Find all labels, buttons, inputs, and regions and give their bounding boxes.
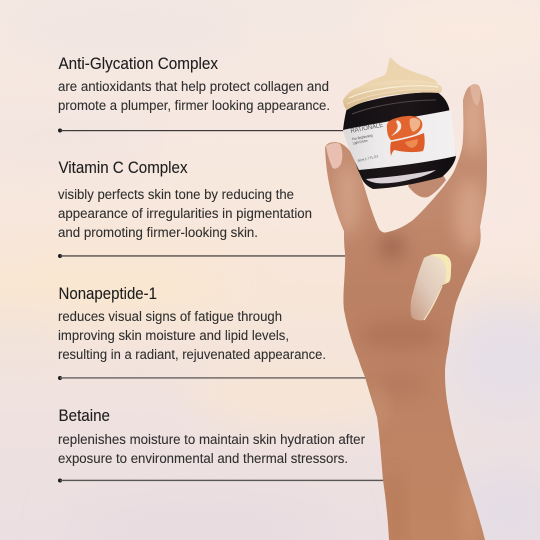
body: Vitamin C Complex description (58, 187, 312, 240)
text block: Anti-Glycation Complex (58, 55, 330, 113)
glass highlight (352, 100, 436, 114)
body: Vitamin C Complex description: visibly perfects skin tone by reducing the (58, 187, 294, 202)
body: Betaine description (58, 432, 366, 466)
skin shading (336, 86, 486, 540)
jar (343, 57, 456, 189)
hand and arm (325, 84, 487, 540)
index fingertip (470, 85, 480, 106)
body: Nonapeptide-1 description (58, 309, 326, 362)
logo mark (387, 116, 425, 156)
body: Nonapeptide-1 description: reduces visual signs of fatigue through (58, 309, 282, 324)
text block: Betaine (58, 407, 366, 466)
jar label (343, 110, 456, 170)
product text (351, 134, 379, 163)
heading: Nonapeptide-1: Nonapeptide-1 (58, 285, 157, 303)
divider line with dot 4 (58, 478, 385, 482)
illustration: hand holding jar (325, 57, 487, 540)
jar glass body (343, 92, 456, 189)
finger behind jar (408, 170, 446, 197)
body: Nonapeptide-1 description: resulting in a radiant, rejuvenated appearance. (58, 347, 326, 362)
product text: The Brightening (351, 134, 373, 141)
divider line with dot 3 (58, 376, 366, 380)
body: Nonapeptide-1 description: improving skin moisture and lipid levels, (58, 328, 289, 343)
body: Anti-Glycation Complex description: promote a plumper, firmer looking appearance. (58, 98, 330, 113)
heading: Vitamin C Complex: Vitamin C Complex (58, 159, 188, 177)
jar base reflection (366, 170, 436, 183)
lid ring with cream (343, 57, 442, 110)
product text: Light Crème (352, 139, 368, 145)
cream swatch on hand (411, 254, 451, 320)
body: Vitamin C Complex description: and promoting firmer-looking skin. (58, 225, 258, 240)
brand text: RATIONALE (350, 122, 384, 135)
body: Anti-Glycation Complex description: are antioxidants that help protect collagen and (58, 79, 329, 94)
body: Anti-Glycation Complex description (58, 79, 330, 113)
divider line with dot 1 (58, 128, 343, 132)
body: Betaine description: exposure to environmental and thermal stressors. (58, 451, 348, 466)
divider line with dot 2 (58, 254, 345, 258)
text block: Vitamin C Complex (58, 159, 312, 240)
body: Vitamin C Complex description: appearance of irregularities in pigmentation (58, 206, 312, 221)
heading: Anti-Glycation Complex: Anti-Glycation Complex (58, 55, 219, 73)
product text: 50ml 1.7 FL.OZ (357, 154, 379, 163)
text block: Nonapeptide-1 (58, 285, 326, 362)
body: Betaine description: replenishes moisture to maintain skin hydration after (58, 432, 366, 447)
heading: Betaine: Betaine (58, 407, 110, 425)
thumb nail (326, 143, 342, 169)
